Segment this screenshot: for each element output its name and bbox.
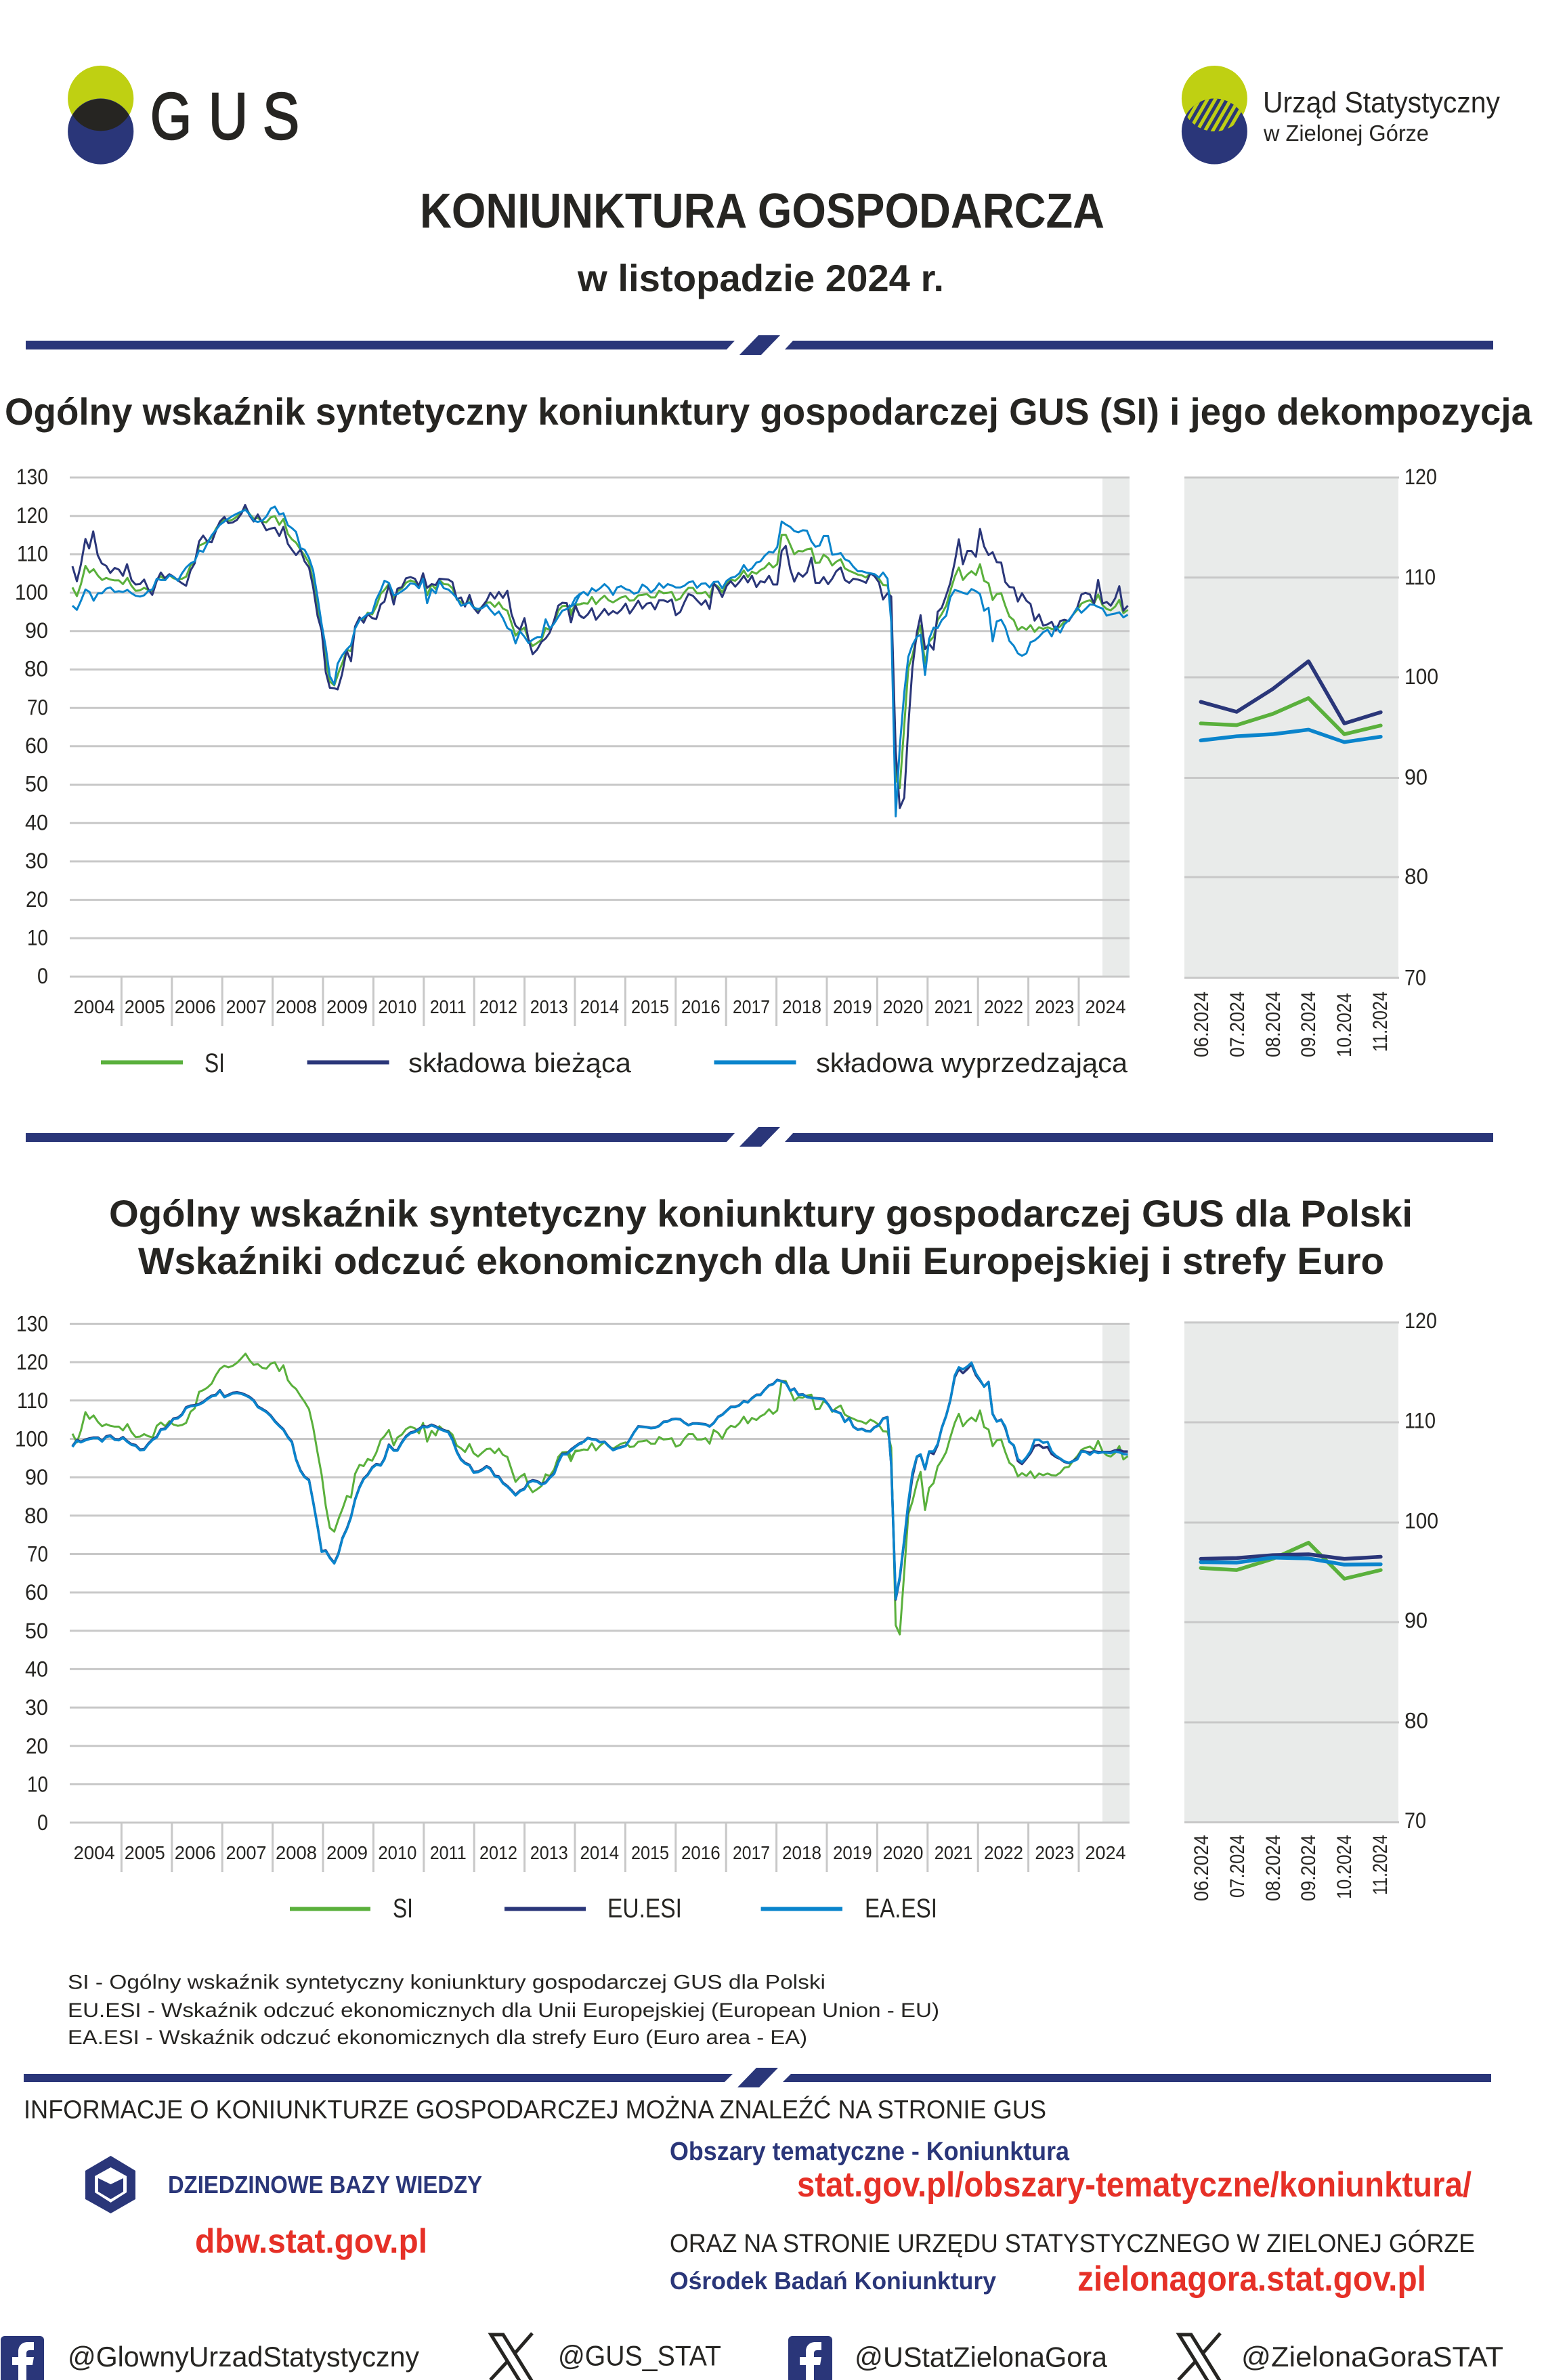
y axis labels: 80 [24,1504,48,1528]
x axis year labels: 2007 [226,1842,267,1863]
month labels: 09.2024 [1297,992,1320,1057]
x axis year labels: 2010 [378,1842,416,1863]
y axis labels: 40 [25,810,48,834]
y axis labels: 90 [25,1465,48,1489]
month labels: 09.2024 [1297,1835,1320,1901]
y axis labels: 100 [15,580,48,604]
social: X GUS: @GUS_STAT [558,2340,721,2372]
logo: GUS: U [209,79,248,153]
x axis year labels: 2005 [125,1842,165,1863]
y axis labels: 70 [27,1542,48,1566]
y axis labels: 40 [25,1657,48,1681]
x axis year labels: 2016 [681,1842,721,1863]
panel: chart 2 last six months [1184,1309,1438,1901]
x axis year labels: 2015 [631,1842,669,1863]
x axis year labels: 2004 [74,996,115,1017]
x axis year labels: 2006 [175,996,216,1017]
series: last months [1201,1543,1381,1579]
x axis year labels: 2018 [782,1842,821,1863]
x axis year labels: 2024 [1085,996,1125,1017]
y axis labels: 10 [27,1772,48,1796]
notes: abbreviations: SI - Ogólny wskaźnik syntetyczny koniunktury gospodarczej GUS dla Polski [68,1972,825,1994]
x axis year labels: 2023 [1035,996,1074,1017]
y axis labels: 50 [25,772,48,796]
heading: section 1: Ogólny wskaźnik syntetyczny koniunktury gospodarczej GUS (SI) i jego dekompozycja [5,390,1532,433]
y axis labels: 30 [25,1695,48,1720]
x axis year labels: 2017 [733,1842,770,1863]
y axis labels: 30 [25,849,48,873]
x axis year labels: 2021 [935,1842,972,1863]
heading: section 2: Ogólny wskaźnik syntetyczny koniunktury gospodarczej GUS dla Polski [109,1192,1413,1235]
social: X US Zielona Góra [1178,2333,1503,2380]
month labels [1190,1835,1392,1901]
right axis labels: 80 [1404,1708,1428,1733]
right axis labels: 110 [1404,565,1436,589]
divider 1 [26,335,1493,355]
x axis year labels: 2019 [833,996,872,1017]
month labels: 07.2024 [1226,992,1249,1057]
x axis year labels: 2012 [479,996,517,1017]
x axis year labels: 2021 [935,996,972,1017]
panel: chart 1 last six months [1184,465,1438,1057]
panel: chart 2 long-term [15,1311,1130,1872]
y axis labels: 0 [37,964,48,988]
legend: chart 1: składowa wyprzedzająca [816,1048,1128,1078]
month labels: 10.2024 [1333,1835,1356,1899]
legend: chart 2: EU.ESI [607,1894,682,1924]
y axis labels: 120 [16,503,48,528]
x axis year labels: 2018 [782,996,821,1017]
y axis labels: 130 [16,465,48,489]
link: zielonagora.stat.gov.pl: zielonagora.stat.gov.pl [1077,2259,1426,2299]
x axis year labels: 2010 [378,996,416,1017]
right axis labels: 120 [1404,465,1437,489]
y axis labels: 130 [16,1311,48,1336]
series: składowa bieżąca [72,505,1128,808]
y axis labels: 100 [15,1426,48,1451]
legend: chart 1: SI [205,1048,225,1078]
month labels: 08.2024 [1262,992,1285,1057]
notes: abbreviations [68,1972,939,2049]
logo: Urząd Statystyczny w Zielonej Górze: Urząd Statystyczny [1263,86,1500,119]
series: SI [72,507,1128,788]
legend: chart 2 [290,1894,937,1924]
month labels: 06.2024 [1190,1835,1213,1901]
x axis year labels: 2008 [276,1842,317,1863]
x axis year labels: 2006 [175,1842,216,1863]
right axis labels: 80 [1404,864,1428,889]
month labels [1190,992,1392,1057]
y axis labels: 70 [27,695,48,719]
x axis year labels: 2011 [430,996,467,1017]
right axis labels: 70 [1404,966,1426,990]
social: Facebook US Zielona Góra: @UStatZielonaGora [855,2341,1108,2373]
month labels: 11.2024 [1369,992,1392,1052]
notes: abbreviations: EU.ESI - Wskaźnik odczuć ekonomicznych dla Unii Europejskiej (European Union - EU) [68,1999,939,2022]
legend: chart 2: EA.ESI [865,1894,937,1924]
x axis year labels: 2020 [883,1842,924,1863]
y axis labels: 20 [26,1734,48,1758]
panel: chart 1 long-term [15,465,1130,1026]
x axis year labels [74,996,1126,1017]
title: KONIUNKTURA GOSPODARCZA [420,184,1104,238]
x axis year labels: 2012 [479,1842,517,1863]
legend: chart 2: SI [393,1894,413,1924]
month labels: 10.2024 [1333,993,1356,1057]
x axis year labels: 2017 [733,996,770,1017]
y axis labels: 20 [26,887,48,912]
heading: section 2: Wskaźniki odczuć ekonomicznych dla Unii Europejskiej i strefy Euro [138,1239,1384,1282]
x axis year labels: 2024 [1085,1842,1125,1863]
subtitle: w listopadzie 2024 r. [577,257,944,299]
x axis year labels: 2020 [883,996,924,1017]
y axis labels: 120 [16,1350,48,1374]
x axis year labels: 2013 [530,1842,568,1863]
y axis labels: 80 [24,657,48,681]
month labels: 11.2024 [1369,1835,1392,1895]
series: EU.ESI [72,1364,1128,1600]
right axis labels: 90 [1404,765,1428,790]
y axis labels: 10 [27,925,48,950]
logo: GUS [68,66,299,165]
series: last months [1201,661,1381,742]
x axis year labels: 2019 [833,1842,872,1863]
right axis labels: 100 [1404,664,1438,689]
x axis year labels: 2022 [984,996,1023,1017]
divider 3 [24,2068,1491,2087]
x axis year labels: 2013 [530,996,568,1017]
x axis year labels: 2009 [326,1842,368,1863]
social: Facebook GUS [1,2336,419,2380]
x axis year labels: 2009 [326,996,368,1017]
icon: hexagon databases [85,2156,135,2213]
social: Facebook US Zielona Góra [788,2336,1108,2380]
text: research centre: Ośrodek Badań Koniunktury [670,2267,996,2295]
divider 2 [26,1127,1493,1147]
y axis labels: 50 [25,1619,48,1643]
x axis year labels: 2014 [580,996,619,1017]
y axis labels: 90 [25,618,48,643]
x axis year labels: 2016 [681,996,721,1017]
text: info intro: INFORMACJE O KONIUNKTURZE GOSPODARCZEJ MOŻNA ZNALEŹĆ NA STRONIE GUS [24,2096,1046,2124]
x axis year labels: 2015 [631,996,669,1017]
heading: section 2 [109,1192,1413,1282]
text: thematic areas: Obszary tematyczne - Koniunktura [670,2138,1070,2166]
right axis labels: 120 [1404,1309,1437,1333]
social: Facebook GUS: @GlownyUrzadStatystyczny [68,2341,419,2373]
month labels: 06.2024 [1190,992,1213,1057]
right axis labels: 110 [1404,1409,1436,1433]
x axis year labels: 2011 [430,1842,467,1863]
text: databases label: DZIEDZINOWE BAZY WIEDZY [168,2171,482,2198]
x axis year labels: 2005 [125,996,165,1017]
y axis labels: 0 [37,1810,48,1835]
x axis year labels [74,1842,1126,1863]
y axis labels [15,465,48,988]
right axis labels [1404,465,1438,990]
y axis labels: 110 [17,1388,48,1413]
x axis year labels: 2022 [984,1842,1023,1863]
y axis labels: 60 [25,734,48,758]
right axis labels [1404,1309,1438,1833]
series: SI [72,1354,1128,1634]
link: stat.gov.pl koniunktura: stat.gov.pl/obszary-tematyczne/koniunktura/ [797,2165,1472,2205]
logo: GUS: G [150,79,192,153]
text: statistical office: ORAZ NA STRONIE URZĘDU STATYSTYCZNEGO W ZIELONEJ GÓRZE [670,2229,1475,2258]
social: X US Zielona Góra: @ZielonaGoraSTAT [1241,2341,1503,2373]
series: EA.ESI [72,1363,1128,1598]
right axis labels: 90 [1404,1608,1428,1632]
y axis labels: 60 [25,1580,48,1605]
notes: abbreviations: EA.ESI - Wskaźnik odczuć ekonomicznych dla strefy Euro (Euro area - EA) [68,2026,807,2049]
social: X GUS [490,2333,721,2380]
legend: chart 1 [101,1048,1128,1078]
logo: Urząd Statystyczny w Zielonej Górze: w Zielonej Górze [1263,121,1429,146]
logo: Urząd Statystyczny w Zielonej Górze [1182,66,1500,164]
month labels: 08.2024 [1262,1835,1285,1901]
y axis labels [15,1311,48,1835]
x axis year labels: 2004 [74,1842,115,1863]
legend: chart 1: składowa bieżąca [408,1048,632,1078]
logo: GUS: S [263,79,299,153]
x axis year labels: 2023 [1035,1842,1074,1863]
right axis labels: 100 [1404,1509,1438,1533]
y axis labels: 110 [17,542,48,566]
series: składowa wyprzedzająca [72,507,1128,816]
link: dbw.stat.gov.pl: dbw.stat.gov.pl [195,2222,427,2260]
month labels: 07.2024 [1226,1835,1249,1898]
x axis year labels: 2014 [580,1842,619,1863]
right axis labels: 70 [1404,1808,1426,1833]
x axis year labels: 2008 [276,996,317,1017]
x axis year labels: 2007 [226,996,267,1017]
